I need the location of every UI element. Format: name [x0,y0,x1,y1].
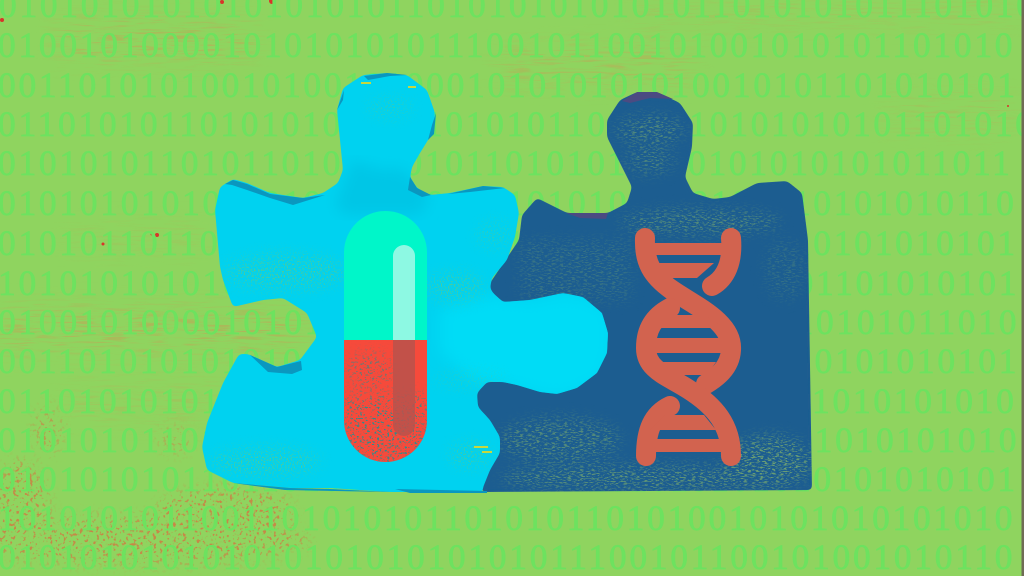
capsule: lower highlight [393,340,415,436]
binary digit rows: 00110101010101010101010101010101010101010101010101 [0,341,1019,381]
red specks [0,0,1009,246]
capsule: red half speckle [344,340,427,463]
background texture: lower left orange speckles [0,401,315,572]
puzzle piece: cyan capsule piece [200,70,620,495]
binary digit rows: 10101010110011010101011010101101010010101010101010 [0,498,1015,538]
binary digit rows: 10101010101010101010101010101010101010101101010101 [0,263,1019,303]
blue piece: purple worn top of tab [622,92,673,103]
right edge strip [1022,0,1024,576]
capsule: lower red half [344,340,427,462]
cyan piece: yellow scuffs [361,82,492,453]
binary digit rows: 01010110110101010101010101010101010101010101010101 [0,223,1018,263]
cyan piece: lighter knob [440,294,612,398]
cyan piece: edge shadows [225,73,505,493]
binary digit rows: 01010101101010101010101010101010101010101010101010 [0,420,1019,460]
icon: capsule [344,211,427,463]
binary digit rows: 01010101010110101010101011010101010101010101010110 [0,183,1017,223]
helix strands [645,238,731,456]
blue piece: worn speckle texture [498,110,812,492]
binary digit rows: 01001010000101010101011100101100101001010101101010 [0,25,1015,65]
binary digit rows: 01010101010101010101010101011100101100101001010110 [0,537,1015,576]
cyan piece: shading clipped to outline [335,160,612,398]
icon: DNA double helix [643,238,733,456]
binary digit rows: 01010101011011010101010101010101010101010101010101 [0,459,1018,499]
capsule: upper highlight [393,245,415,340]
binary digit rows: 01001010000101010101010101010101010101010101011010 [0,302,1019,342]
helix rungs [643,243,733,452]
cyan piece: green speckle texture [205,92,516,485]
background texture: orange scratches [0,0,1007,418]
binary digit rows: 01101010101110101010101010101010101010101010101010 [0,381,1017,421]
binary digit rows: 01010101101011010101010110101010110101010101011011 [0,143,1013,183]
capsule: upper mint half [344,211,427,340]
binary digit rows: 00110101010010100101000101010101010010101101010101 [0,65,1018,105]
cyan piece: inner darker shade [342,168,422,212]
puzzle piece: dark blue DNA piece [476,90,820,495]
blue piece: purple shadow at shoulder [566,213,608,219]
